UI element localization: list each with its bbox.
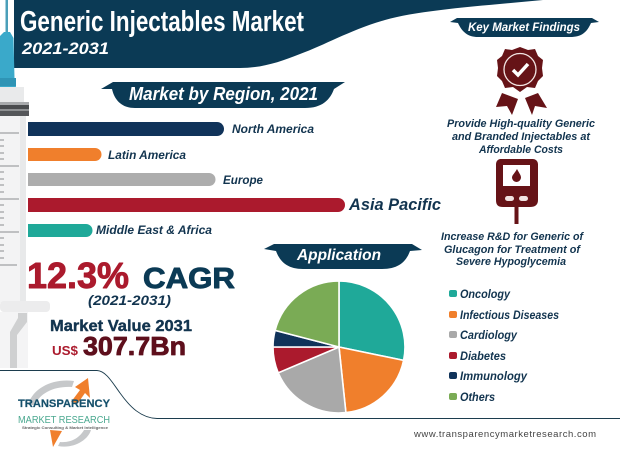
finding text 2: Increase R&D for Generic of (441, 231, 584, 243)
syringe illustration (0, 0, 50, 368)
bar: latin america (28, 148, 102, 161)
logo upper arc (28, 381, 74, 405)
label: europe: Europe (223, 173, 263, 187)
logo lower arc (58, 430, 91, 447)
slice: others (275, 281, 339, 347)
label: asia pacific: Asia Pacific (348, 195, 442, 214)
finding text 1: and Branded Injectables at (452, 131, 591, 143)
logo tagline: Strategic Consulting & Market Intelligence (22, 426, 108, 430)
header banner (14, 0, 543, 68)
CAGR period: (2021-2031) (88, 292, 171, 308)
currency label: US$ (52, 343, 79, 358)
CAGR label: CAGR (143, 263, 235, 295)
logo second line: MARKET RESEARCH (18, 414, 110, 426)
logo: transparency market research (18, 378, 111, 447)
label: middle east and africa: Middle East & Africa (96, 223, 212, 237)
footer divider line (0, 370, 620, 418)
slice: infectious diseases (339, 347, 404, 413)
legend: cardiology: Cardiology (460, 330, 518, 342)
bar: asia pacific (28, 198, 345, 212)
legend: immunology: Immunology (460, 371, 528, 383)
finding text 1: Affordable Costs (478, 144, 563, 156)
slice: oncology (339, 281, 405, 360)
logo upper arrow (71, 378, 90, 403)
finding text 1 (447, 118, 595, 156)
label: latin america: Latin America (108, 148, 186, 162)
market value label: Market Value 2031 (50, 318, 192, 335)
website url: www.transparencymarketresearch.com (413, 429, 596, 440)
legend: infectious diseases: Infectious Diseases (460, 310, 559, 322)
heading: application: Application (296, 247, 381, 264)
bar: europe (28, 173, 216, 186)
bar chart: market by region (28, 122, 442, 237)
pie chart: application share (273, 281, 405, 413)
finding text 1: Provide High-quality Generic (447, 118, 595, 130)
ribbon: application (264, 244, 422, 269)
title: Generic Injectables Market (20, 6, 304, 38)
finding text 2: Glucagon for Treatment of (444, 244, 581, 256)
slice: immunology (273, 330, 339, 347)
legend: oncology: Oncology (460, 289, 511, 301)
logo lower arrow (50, 430, 62, 447)
legend: others: Others (460, 392, 495, 404)
slice: diabetes (273, 347, 339, 373)
legend: application (449, 289, 559, 404)
label: north america: North America (232, 122, 314, 136)
icon: glucose meter (496, 159, 538, 224)
heading: key market findings: Key Market Findings (468, 22, 580, 34)
ribbon: key market findings (450, 18, 599, 37)
finding text 2 (441, 231, 584, 268)
bar: middle east and africa (28, 224, 93, 237)
icon: award badge (496, 47, 547, 115)
bar: north america (28, 122, 224, 136)
legend: diabetes: Diabetes (460, 351, 506, 363)
logo name: TRANSPARENCY (18, 398, 111, 410)
finding text 2: Severe Hypoglycemia (456, 256, 566, 268)
slice: cardiology (278, 347, 346, 413)
subtitle years: 2021-2031 (21, 39, 109, 58)
heading: market by region: Market by Region, 2021 (129, 84, 318, 104)
CAGR value: 12.3% (27, 255, 129, 296)
ribbon: market by region (101, 82, 345, 108)
market value amount: 307.7Bn (83, 331, 186, 361)
